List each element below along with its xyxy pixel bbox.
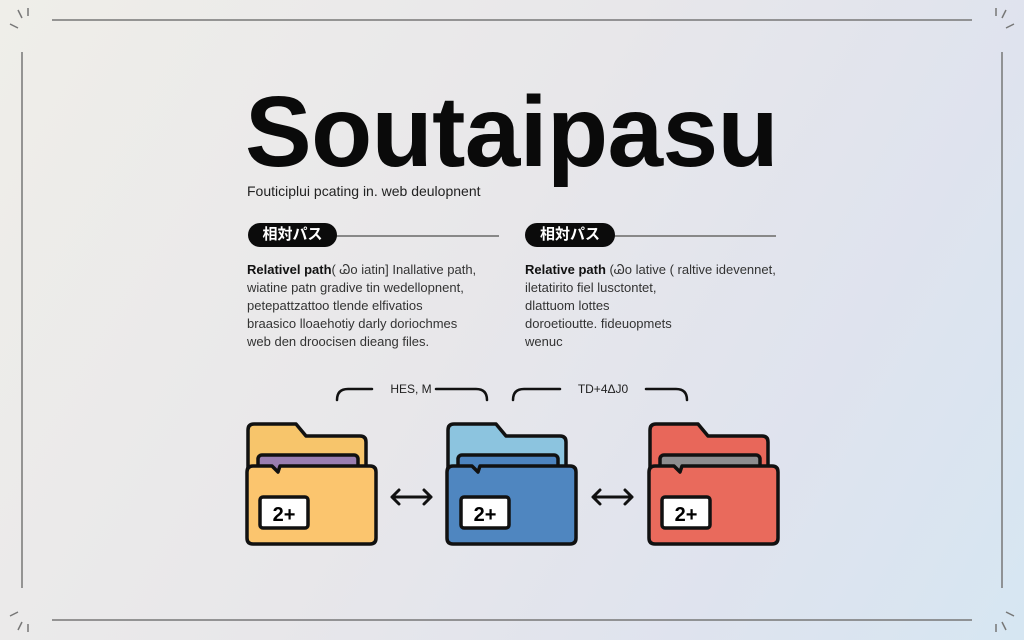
text block left: wiatine patn gradive tin wedellopnent, <box>247 280 464 295</box>
folders: 2+ <box>474 504 496 526</box>
text block left: web den droocisen dieang files. <box>247 334 429 349</box>
text block right: iletatirito fiel lusctontet, <box>525 280 657 295</box>
section right heading: 相対パス <box>540 226 600 243</box>
bracket labels: TD+4ΔJ0 <box>578 382 629 396</box>
folders: 2+ <box>273 504 295 526</box>
folder red <box>649 424 778 544</box>
section left heading: 相対パス <box>262 226 322 243</box>
title: Soutaipasu <box>245 76 778 188</box>
text block left <box>247 262 476 349</box>
bracket labels: HES, M <box>390 382 432 396</box>
text block right <box>525 262 776 349</box>
folder blue <box>447 424 576 544</box>
text block left: Relativel path( Ꮚo iatin] Inallative path, <box>247 262 476 277</box>
subtitle: Fouticiplui pcating in. web deulopnent <box>247 183 480 199</box>
text block right: Relative path (Ꮚo lative ( raltive idevennet, <box>525 262 776 277</box>
folders: 2+ <box>675 504 697 526</box>
text block right: dlattuom lottes <box>525 298 610 313</box>
text block left: petepattzattoo tlende elfivatios <box>247 298 423 313</box>
text block right: doroetioutte. fideuopmets <box>525 316 672 331</box>
text block right: wenuc <box>525 334 563 349</box>
text block left: braasico lloaehotiy darly doriochmes <box>247 316 457 331</box>
folder yellow <box>247 424 376 544</box>
